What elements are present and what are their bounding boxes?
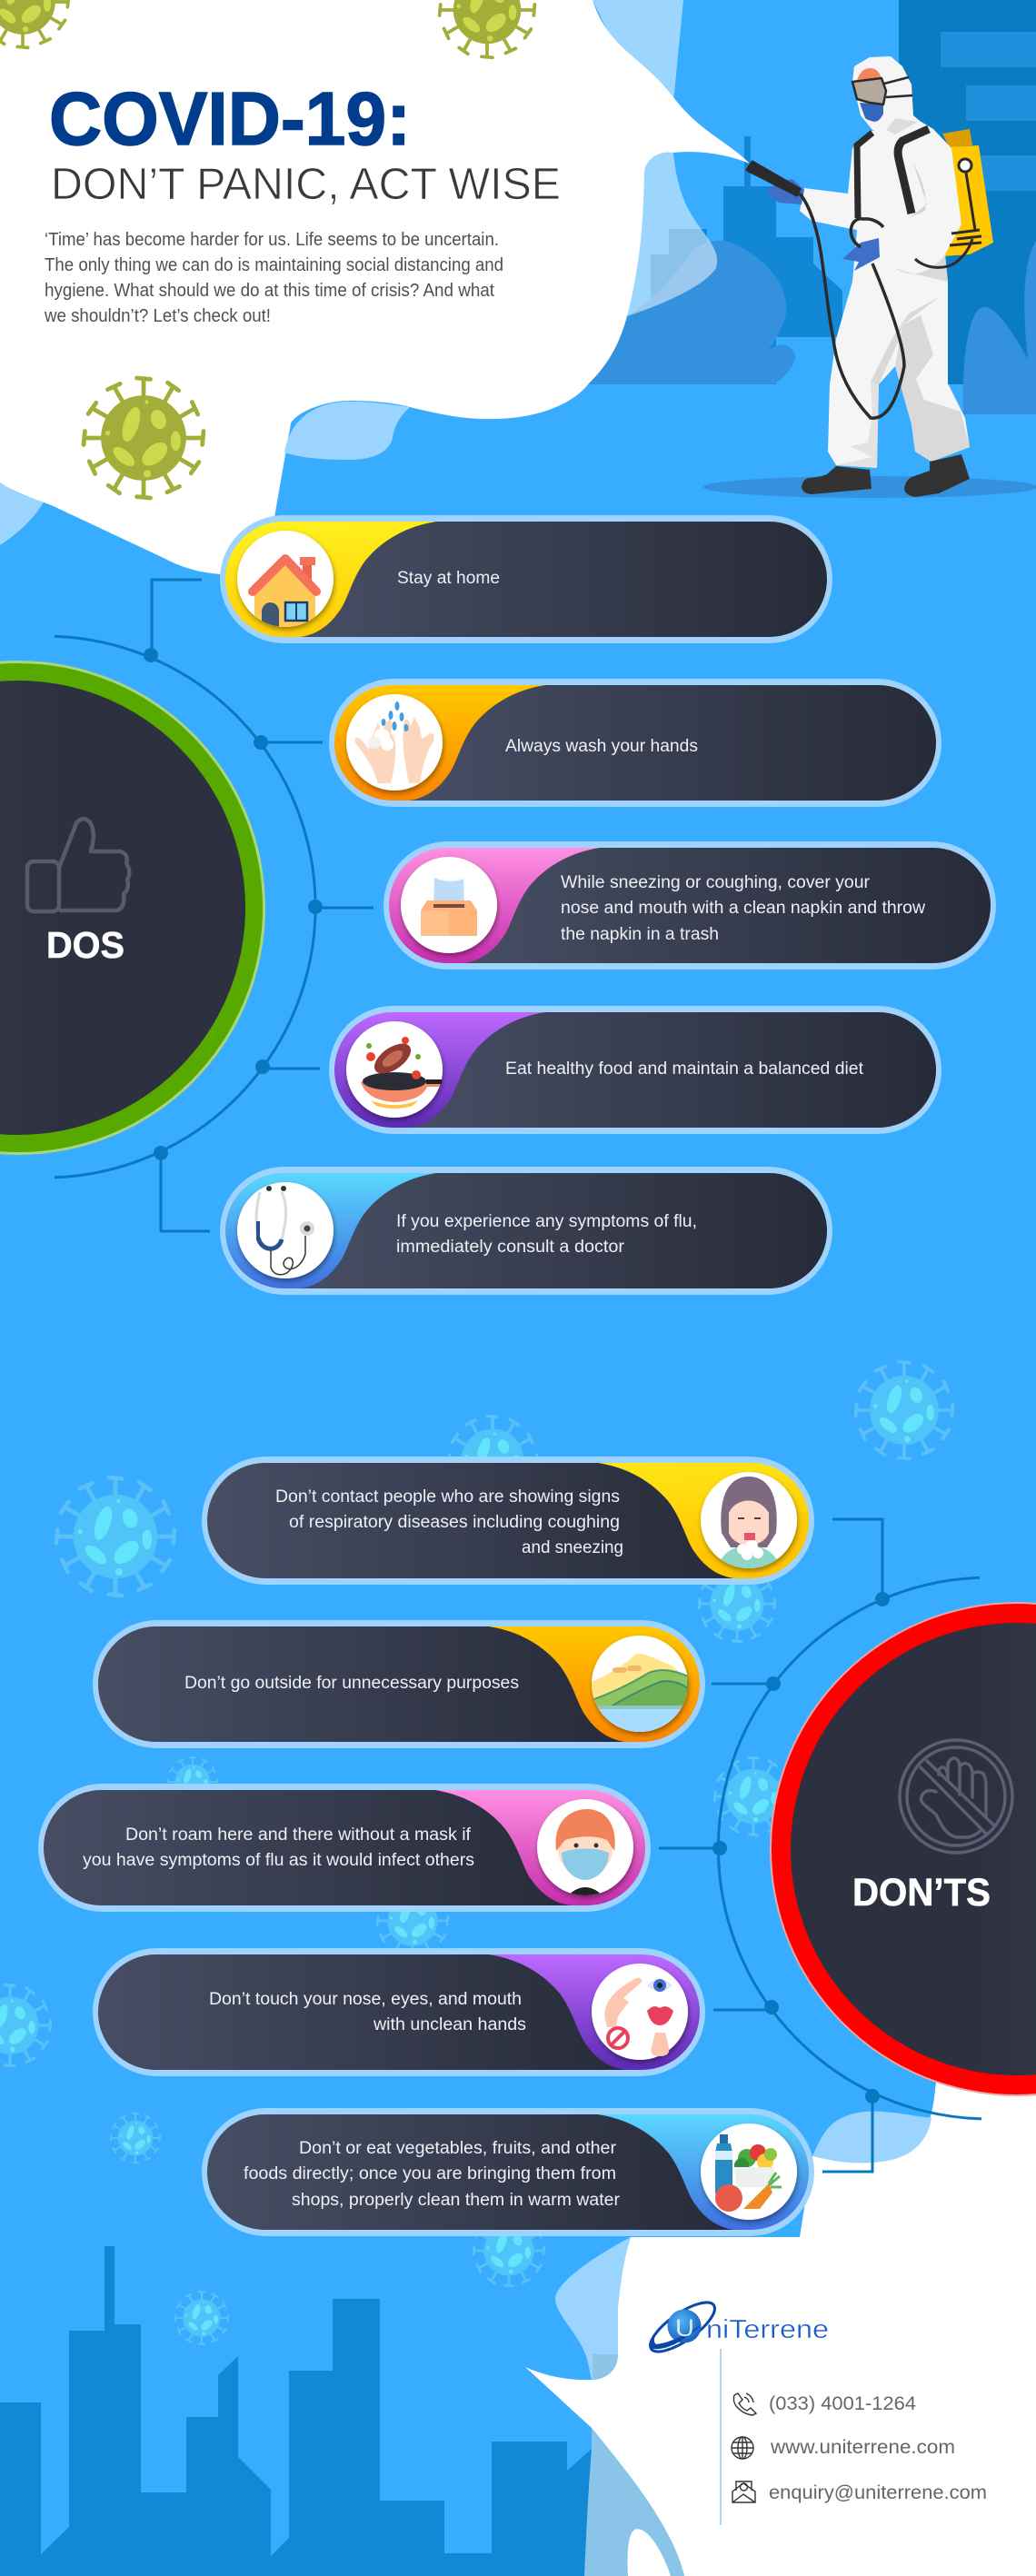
icon: house xyxy=(253,557,316,627)
dos arc with connectors xyxy=(55,580,374,1231)
virus: large green xyxy=(84,378,204,498)
title: DON’T PANIC, ACT WISE xyxy=(51,160,561,209)
text xyxy=(275,1487,623,1557)
icon: frying pan xyxy=(361,1037,442,1109)
icon: vegetables and bottle xyxy=(715,2134,782,2212)
contact: phone: (033) 4001-1264 xyxy=(769,2392,916,2414)
text: the napkin in a trash xyxy=(561,925,719,944)
footer white shape xyxy=(525,2076,1036,2576)
virus: top left green xyxy=(0,0,68,47)
text xyxy=(244,2139,621,2210)
icon: boy with mask xyxy=(556,1809,615,1898)
pill: wash hands xyxy=(329,679,941,807)
text xyxy=(83,1825,474,1870)
logo: uniterrene: U xyxy=(675,2314,694,2342)
pill: dont eat directly xyxy=(202,2108,814,2236)
icon: thumbs up xyxy=(27,819,129,911)
intro paragraph: hygiene. What should we do at this time of crisis? And what xyxy=(45,281,494,301)
virus: faint behind first pill xyxy=(449,1416,536,1505)
contact: email: enquiry@uniterrene.com xyxy=(769,2482,987,2503)
intro paragraph: The only thing we can do is maintaining social distancing and xyxy=(45,255,503,275)
pill: dont touch face xyxy=(93,1948,705,2076)
virus: faint small lower xyxy=(111,2114,160,2163)
virus: faint over skyline xyxy=(175,2292,228,2344)
text: While sneezing or coughing, cover your xyxy=(561,873,871,892)
text: with unclean hands xyxy=(373,2015,526,2034)
text: Don’t roam here and there without a mask if xyxy=(125,1825,472,1845)
heading: donts: DON’TS xyxy=(852,1871,991,1915)
virus: faint near arc xyxy=(714,1757,792,1835)
text: nose and mouth with a clean napkin and throw xyxy=(561,899,925,918)
figure: person in protective suit spraying xyxy=(703,56,1036,498)
text: foods directly; once you are bringing them from xyxy=(244,2164,616,2183)
virus: faint beside first pill xyxy=(699,1566,775,1642)
logo: uniterrene xyxy=(643,2294,829,2360)
text: Don’t go outside for unnecessary purposes xyxy=(184,1674,519,1693)
virus: faint large left xyxy=(56,1477,174,1596)
text: immediately consult a doctor xyxy=(396,1238,625,1257)
virus: faint small left xyxy=(168,1757,217,1806)
pill: dont contact sick people xyxy=(202,1457,814,1585)
pill: cover nose and mouth xyxy=(384,841,996,970)
text: of respiratory diseases including coughing xyxy=(289,1513,620,1532)
text: Don’t touch your nose, eyes, and mouth xyxy=(209,1990,522,2009)
pill: stay at home xyxy=(220,515,832,643)
logo: uniterrene: niTerrene xyxy=(706,2315,829,2344)
title xyxy=(49,76,561,209)
text: you have symptoms of flu as it would infect others xyxy=(83,1851,474,1870)
text xyxy=(209,1990,526,2034)
text xyxy=(396,1212,697,1257)
panel: dos circle xyxy=(0,661,265,1155)
intro paragraph xyxy=(44,230,503,326)
virus: top center green xyxy=(440,0,534,57)
icon: hand, eye, lips, nose xyxy=(604,1978,673,2056)
virus: faint left edge xyxy=(0,1984,51,2066)
virus: faint middle xyxy=(377,1885,448,1956)
pill: eat healthy food xyxy=(329,1006,941,1134)
text: and sneezing xyxy=(522,1538,623,1557)
top light wave shapes xyxy=(0,0,717,545)
panel: donts circle xyxy=(770,1602,1036,2096)
bottom skyline xyxy=(0,2246,592,2576)
intro paragraph: we shouldn’t? Let’s check out! xyxy=(44,306,271,326)
text: shops, properly clean them in warm water xyxy=(292,2191,621,2210)
text: Always wash your hands xyxy=(505,737,698,756)
icon: tissue box xyxy=(421,878,477,936)
contact divider xyxy=(720,2349,722,2525)
virus: faint below last pill xyxy=(473,2215,544,2286)
light blob under header xyxy=(284,402,410,460)
pill: dont go outside xyxy=(93,1620,705,1748)
icon: stethoscope xyxy=(256,1186,314,1275)
title: COVID-19: xyxy=(49,76,411,161)
intro paragraph: ‘Time’ has become harder for us. Life seems to be uncertain. xyxy=(45,230,499,250)
text xyxy=(561,873,925,944)
text: Stay at home xyxy=(397,569,500,588)
pill: consult a doctor xyxy=(220,1167,832,1295)
text: Don’t or eat vegetables, fruits, and other xyxy=(299,2139,617,2158)
text: Don’t contact people who are showing signs xyxy=(275,1487,620,1507)
donts arc with connectors xyxy=(659,1519,981,2172)
virus: faint top right xyxy=(856,1362,952,1458)
icon: hands with water xyxy=(355,701,434,783)
contact: website: www.uniterrene.com xyxy=(770,2436,955,2458)
text: If you experience any symptoms of flu, xyxy=(396,1212,697,1231)
heading: dos: DOS xyxy=(46,924,125,966)
icon: hills landscape xyxy=(592,1654,688,1733)
city skyline behind sprayer xyxy=(588,0,1036,414)
icon: no hand xyxy=(900,1740,1012,1853)
text: Eat healthy food and maintain a balanced diet xyxy=(505,1059,864,1079)
white header blob xyxy=(0,0,750,574)
pill: dont roam without mask xyxy=(38,1784,651,1912)
icon: sneezing woman xyxy=(721,1477,777,1568)
